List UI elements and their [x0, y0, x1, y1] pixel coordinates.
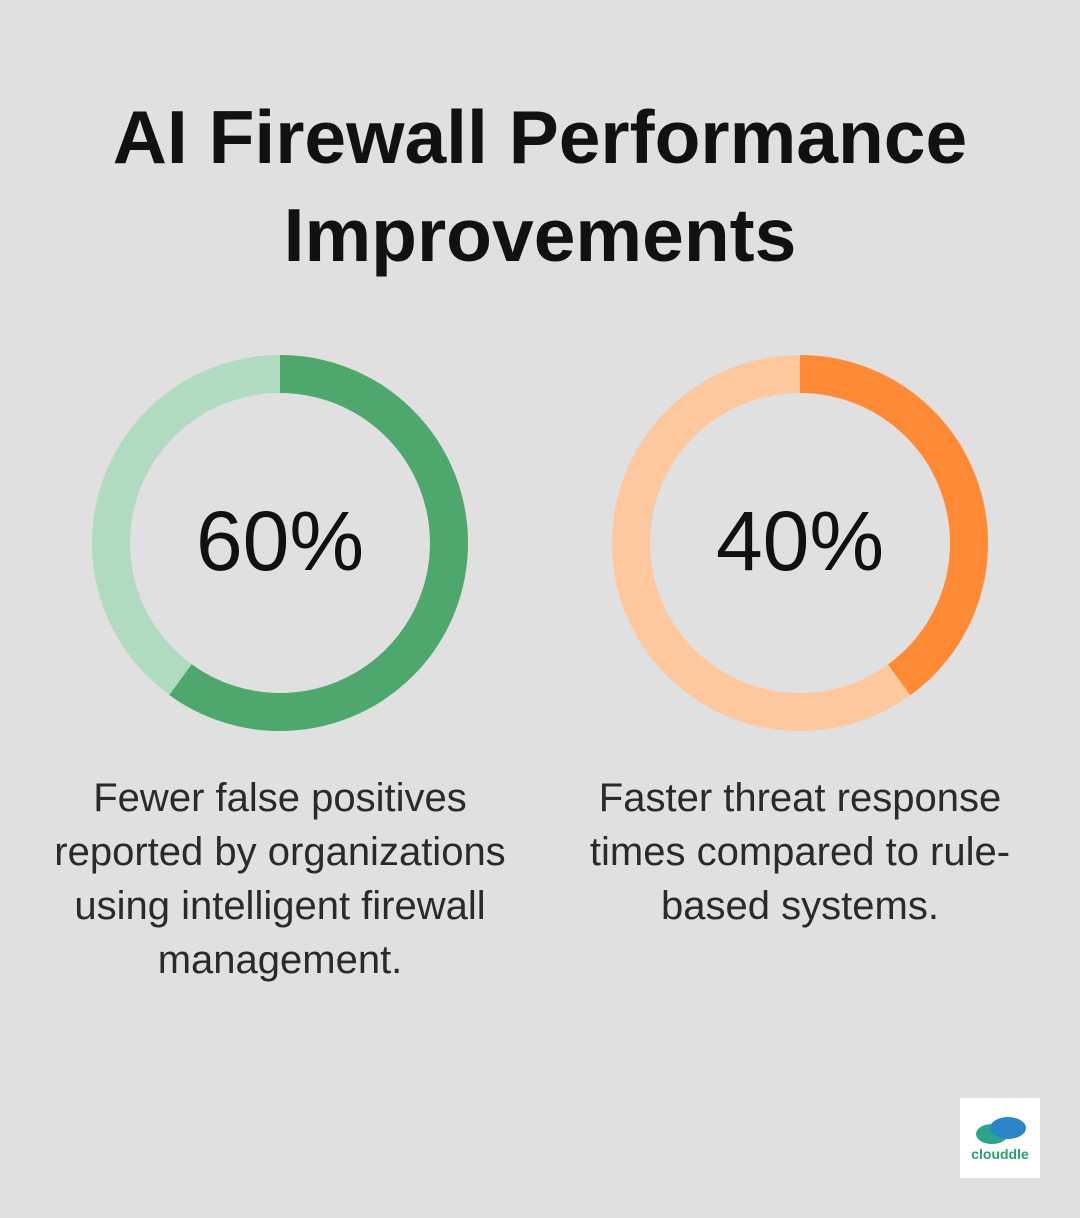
chart: 60% donut: [92, 355, 468, 731]
text: right description: [590, 776, 1010, 928]
text: right description: Faster threat response: [599, 776, 1001, 820]
text: left description: [54, 776, 506, 982]
chart: 40% donut: [612, 355, 988, 731]
text: right description: based systems.: [661, 884, 939, 928]
chart: 40% donut: 40%: [716, 494, 884, 588]
chart: 60% donut: 60%: [196, 494, 364, 588]
text: left description: using intelligent firewall: [74, 884, 486, 928]
text: left description: management.: [158, 938, 402, 982]
text: left description: Fewer false positives: [93, 776, 467, 820]
title: AI Firewall Performance: [113, 95, 967, 179]
title: Improvements: [284, 193, 796, 277]
text: left description: reported by organizations: [54, 830, 506, 874]
logo: clouddle: clouddle: [971, 1146, 1029, 1162]
title: [113, 95, 967, 277]
logo: clouddle: [960, 1098, 1040, 1178]
text: right description: times compared to rule-: [590, 830, 1010, 874]
